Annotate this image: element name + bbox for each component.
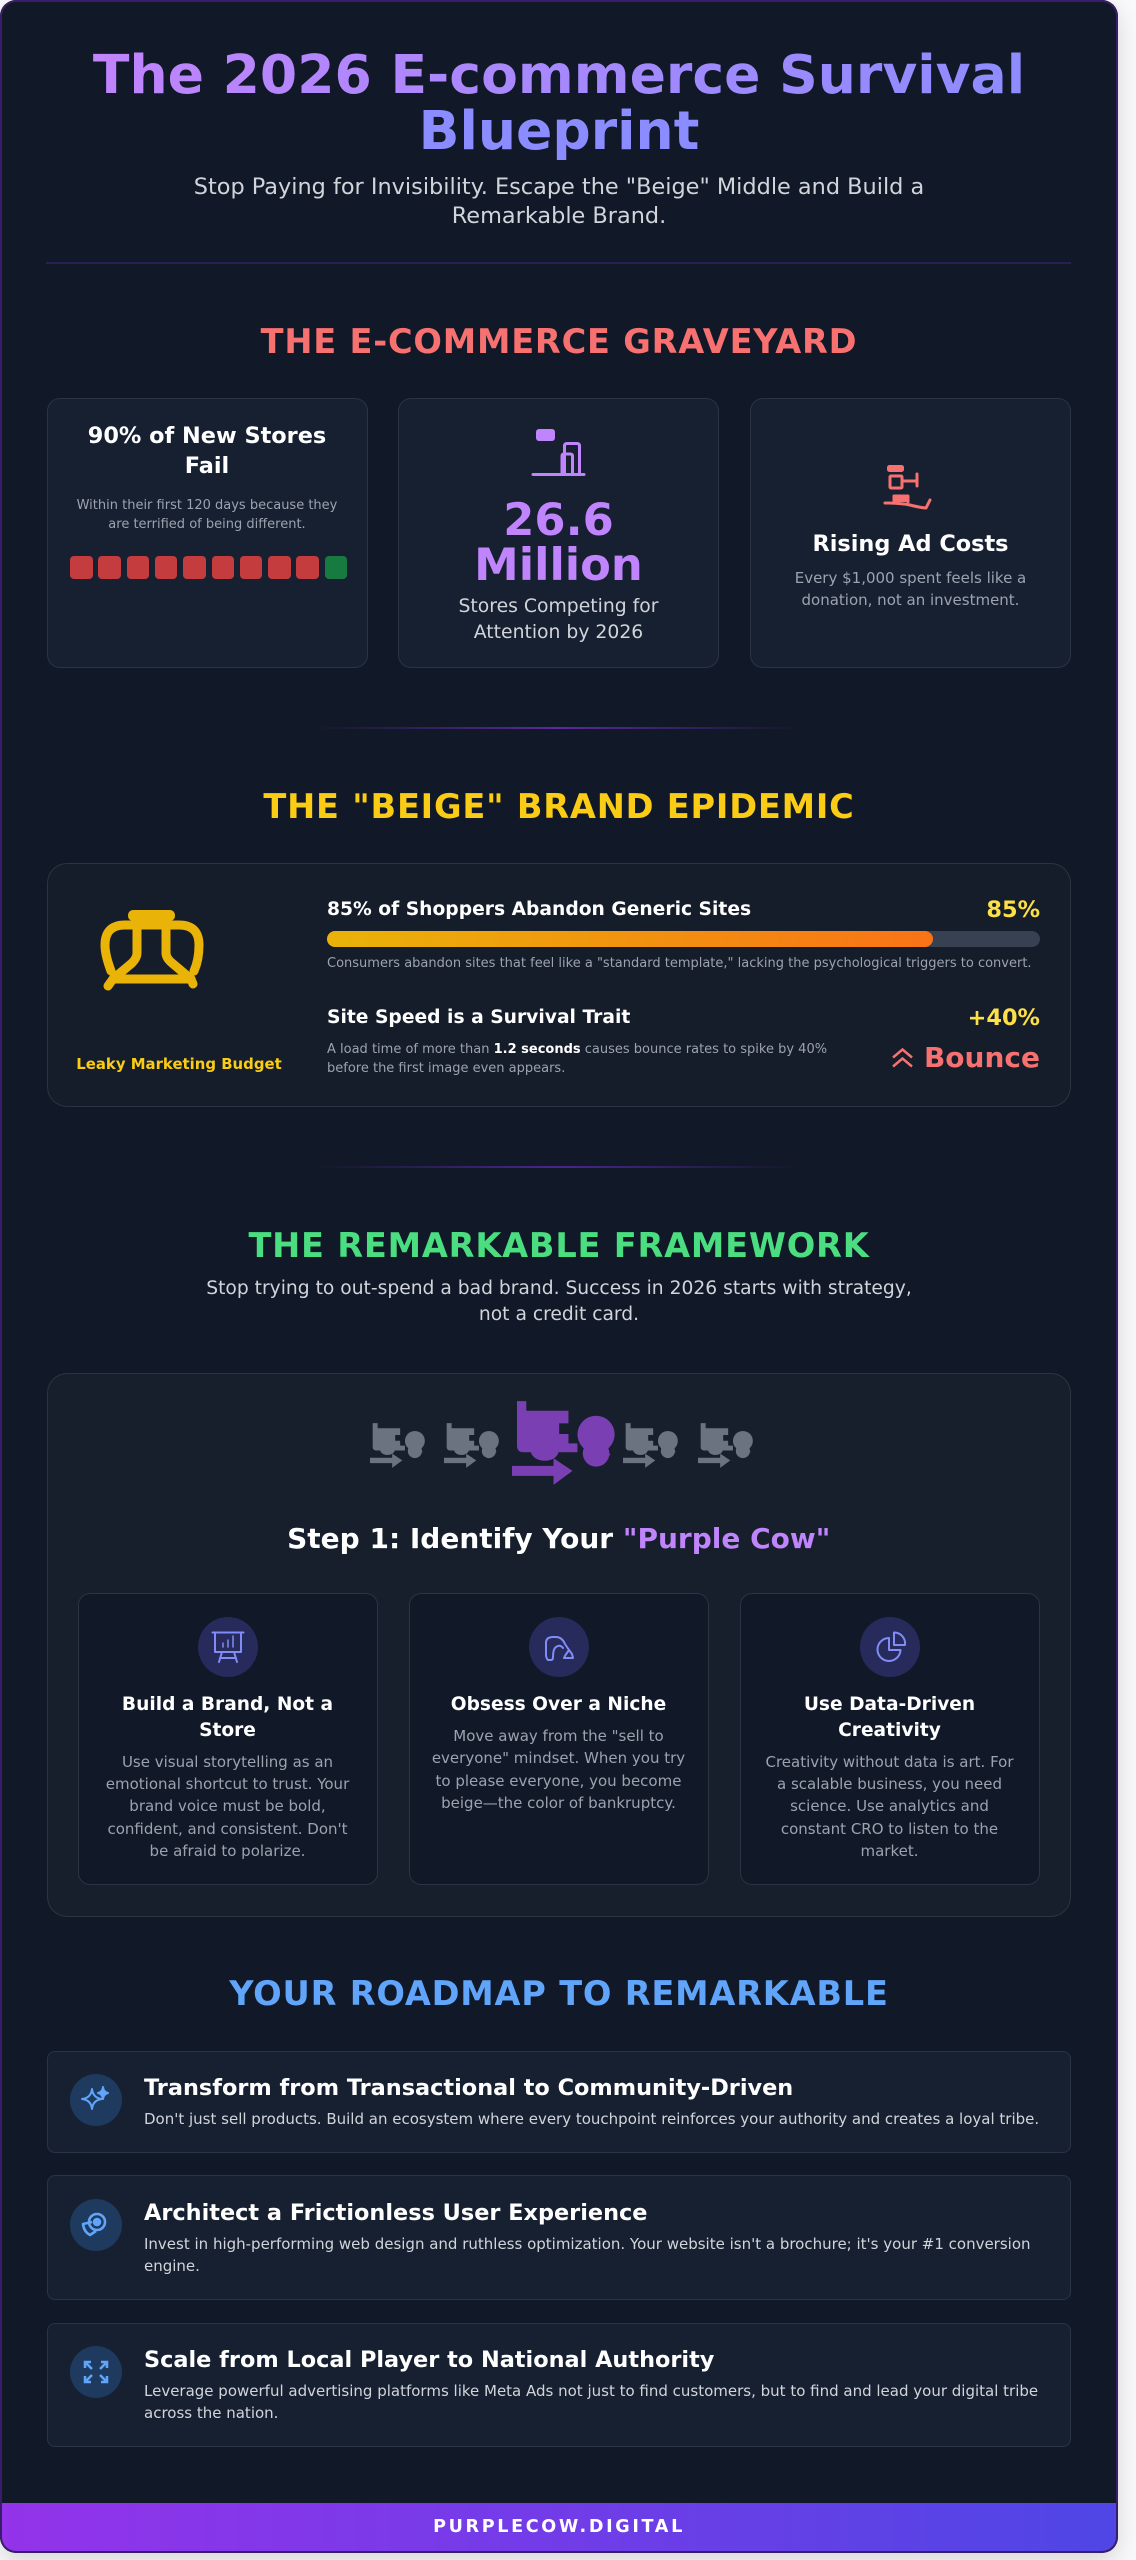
statistic caption: Stores Competing for: [458, 596, 658, 617]
panel: rising ad costs: [750, 398, 1071, 668]
heading: graveyard: THE E-COMMERCE GRAVEYARD: [261, 322, 857, 361]
sub-card text: brand voice must be bold,: [129, 1797, 326, 1815]
sub-card text: confident, and consistent. Don't: [107, 1820, 348, 1838]
section intro: [206, 1278, 912, 1325]
sub-card heading: Obsess Over a Niche: [451, 1694, 666, 1715]
sub-card text: market.: [860, 1842, 918, 1860]
icon: hand and coin: [884, 465, 932, 510]
subtitle: Stop Paying for Invisibility. Escape the "Beige" Middle and Build a: [194, 174, 924, 200]
statistic caption: Attention by 2026: [474, 622, 643, 643]
stat description: [327, 1042, 827, 1076]
icon: swirl: [70, 2199, 122, 2251]
sub-card heading: Use Data-Driven: [804, 1694, 975, 1715]
footer: [2, 2503, 1116, 2551]
sub-card: obsess over a niche: [408, 1593, 709, 1885]
icon: purple cow: [512, 1401, 615, 1485]
bounce callout: Bounce: [924, 1041, 1040, 1074]
item heading: Transform from Transactional to Community-Driven: [144, 2075, 793, 2101]
icon: grey cow: [623, 1423, 678, 1468]
sub-card text: [106, 1752, 350, 1860]
big statistic: [474, 493, 643, 591]
sub-card heading: Store: [199, 1720, 256, 1741]
sub-card text: to please everyone, you become: [436, 1772, 681, 1790]
item text: engine.: [144, 2257, 200, 2275]
title: Blueprint: [419, 99, 699, 162]
icon: sparkles: [70, 2074, 122, 2126]
item heading: Scale from Local Player to National Authority: [144, 2347, 714, 2373]
card text: are terrified of being different.: [108, 517, 306, 532]
panel: beige brand stats: [46, 863, 1071, 1107]
icon: leaky funnel: [100, 910, 204, 990]
panel: 90% of new stores fail: [46, 398, 368, 668]
stat label: 85% of Shoppers Abandon Generic Sites: [327, 899, 751, 920]
sub-card text: Creativity without data is art. For: [765, 1752, 1014, 1770]
card text: Every $1,000 spent feels like a: [795, 569, 1026, 587]
icon: pie chart: [860, 1617, 920, 1677]
sub-card text: a scalable business, you need: [777, 1775, 1002, 1793]
card text: Within their first 120 days because they: [77, 498, 337, 513]
panel: purple cow framework: [46, 1373, 1071, 1917]
sub-card: build a brand: [78, 1593, 378, 1885]
icon caption: Leaky Marketing Budget: [76, 1055, 282, 1073]
header: [46, 43, 1071, 264]
item text: [144, 2382, 1038, 2422]
sub-card heading: [122, 1694, 333, 1741]
sub-card text: constant CRO to listen to the: [781, 1820, 998, 1838]
item text: Leverage powerful advertising platforms like Meta Ads not just to find customers, but to find and lead your digital tribe: [144, 2382, 1038, 2400]
heading: roadmap: YOUR ROADMAP TO REMARKABLE: [229, 1974, 889, 2013]
icon: storefront: [532, 429, 586, 476]
sub-card text: science. Use analytics and: [790, 1797, 989, 1815]
progress bar: [327, 931, 1040, 946]
sub-card text: [765, 1752, 1014, 1860]
icon: grey cow: [444, 1423, 499, 1468]
heading: remarkable framework: THE REMARKABLE FRAMEWORK: [248, 1226, 870, 1265]
panel: 26.6 million stores: [398, 398, 719, 668]
statistic caption: [458, 596, 658, 643]
card text: donation, not an investment.: [802, 591, 1019, 609]
stat label: Site Speed is a Survival Trait: [327, 1007, 630, 1028]
title: The 2026 E-commerce Survival: [93, 43, 1025, 106]
item text: Don't just sell products. Build an ecosystem where every touchpoint reinforces your authority and creates a loyal tribe.: [144, 2110, 1039, 2128]
icon row: cows: [370, 1401, 753, 1485]
big statistic: Million: [474, 538, 643, 591]
sub-card text: Move away from the "sell to: [453, 1727, 664, 1745]
section intro: not a credit card.: [479, 1304, 639, 1325]
roadmap item 2: [46, 2175, 1071, 2300]
card text: [795, 569, 1026, 609]
item heading: Architect a Frictionless User Experience: [144, 2200, 647, 2226]
icon: grey cow: [370, 1423, 425, 1468]
stat description: A load time of more than 1.2 seconds causes bounce rates to spike by 40%: [327, 1042, 827, 1057]
item text: Invest in high-performing web design and ruthless optimization. Your website isn't a brochure; it's your #1 conversion: [144, 2235, 1031, 2253]
card heading: Rising Ad Costs: [812, 531, 1008, 557]
stat: shoppers abandon: [327, 897, 1040, 970]
sub-card text: be afraid to polarize.: [150, 1842, 305, 1860]
item text: across the nation.: [144, 2404, 278, 2422]
heading: beige epidemic: THE "BEIGE" BRAND EPIDEMIC: [263, 787, 855, 826]
section intro: Stop trying to out-spend a bad brand. Success in 2026 starts with strategy,: [206, 1278, 912, 1299]
sub-card text: everyone" mindset. When you try: [432, 1749, 685, 1767]
stat value: 85%: [986, 897, 1040, 923]
icon: grey cow: [698, 1423, 753, 1468]
subtitle: [194, 174, 924, 229]
roadmap item 1: [46, 2051, 1071, 2153]
footer brand: PURPLECOW.DIGITAL: [433, 2517, 685, 2537]
sub-card text: emotional shortcut to trust. Your: [106, 1775, 349, 1793]
card heading: 90% of New Stores: [88, 423, 326, 449]
subtitle: Remarkable Brand.: [452, 203, 666, 229]
sub-card text: [432, 1727, 685, 1812]
failure bar chart: nine red, one green: [70, 556, 347, 579]
icon: expand arrows: [70, 2346, 122, 2398]
sub-card heading: [804, 1694, 975, 1741]
item text: [144, 2235, 1031, 2275]
sub-card text: Use visual storytelling as an: [122, 1752, 333, 1770]
stat description: before the first image even appears.: [327, 1061, 565, 1076]
stat value: +40%: [968, 1005, 1040, 1031]
sub-card heading: Creativity: [838, 1720, 941, 1741]
icon: niche target: [528, 1617, 588, 1677]
big statistic: 26.6: [503, 493, 614, 546]
card heading: [88, 423, 326, 479]
sub-card heading: Build a Brand, Not a: [122, 1694, 333, 1715]
roadmap item 3: [46, 2323, 1071, 2447]
sub-card text: beige—the color of bankruptcy.: [441, 1794, 676, 1812]
card text: [77, 498, 337, 532]
stat description: Consumers abandon sites that feel like a "standard template," lacking the psychological triggers to convert.: [327, 956, 1032, 970]
icon: double chevron up: [892, 1048, 913, 1068]
sub-card: data-driven creativity: [740, 1593, 1040, 1885]
step heading: Step 1: Identify Your "Purple Cow": [287, 1522, 830, 1555]
stat: site speed: [327, 1005, 1040, 1076]
title: [93, 43, 1025, 162]
card heading: Fail: [185, 453, 229, 479]
icon: presentation chart: [198, 1617, 258, 1677]
